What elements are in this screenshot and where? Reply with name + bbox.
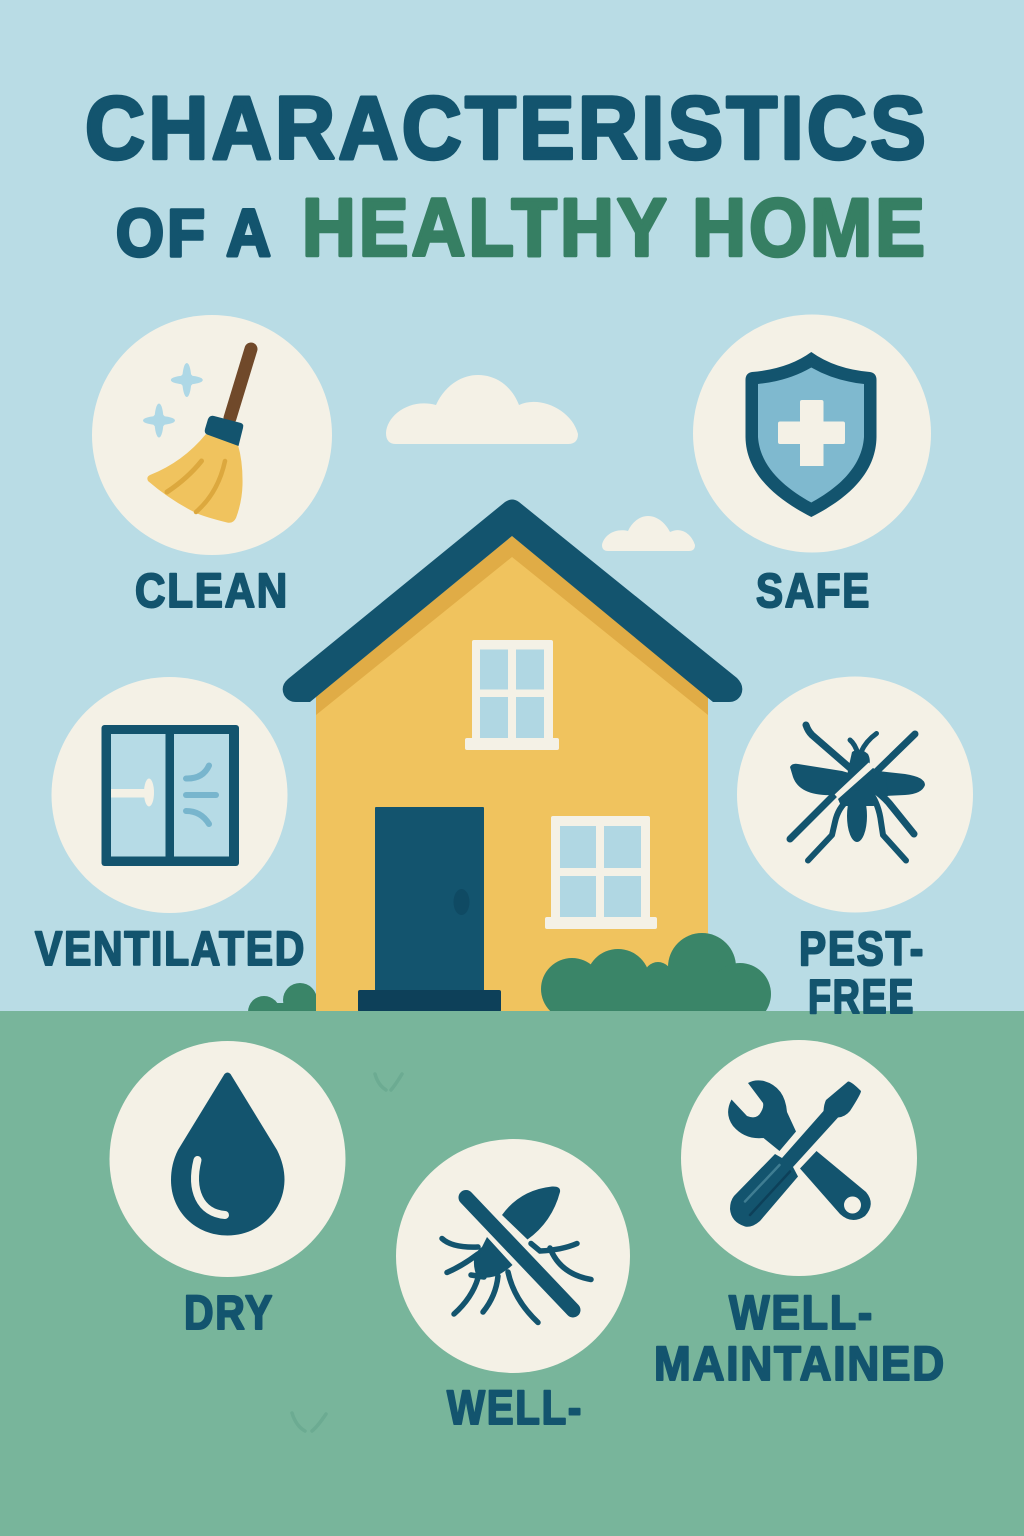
panel: dry	[110, 1041, 346, 1340]
well circle	[396, 1139, 630, 1373]
title line 2 lead: OF A	[116, 196, 274, 271]
title line 1: CHARACTERISTICS	[85, 78, 929, 178]
maintained label: WELL-	[729, 1287, 874, 1340]
pest-free label	[799, 923, 925, 1024]
panel: pest-free	[737, 676, 973, 1024]
right bush	[541, 933, 771, 1025]
door	[375, 807, 484, 997]
roof shadow	[316, 536, 708, 715]
dry circle	[110, 1041, 346, 1277]
icon: water drop	[171, 1072, 284, 1236]
panel: well-lit	[396, 1139, 630, 1435]
panel: clean	[92, 315, 332, 618]
panel: well-maintained	[654, 1040, 946, 1391]
well label: WELL-	[447, 1382, 583, 1435]
icon: window	[102, 725, 239, 866]
house	[283, 500, 742, 1012]
grass tuft lower	[292, 1413, 326, 1431]
left bush	[248, 983, 320, 1028]
house wall	[316, 536, 708, 1012]
sky background	[0, 0, 1024, 1012]
icon: wrench and screwdriver	[728, 1080, 871, 1227]
pest-free label: FREE	[808, 971, 915, 1024]
small cloud	[602, 516, 695, 551]
roof	[283, 500, 742, 702]
safe label: SAFE	[756, 565, 871, 618]
icon: shield	[746, 352, 876, 517]
pest-free label: PEST-	[799, 923, 925, 976]
icon: broom	[143, 349, 251, 523]
title line 2 highlight: HEALTHY HOME	[302, 182, 928, 274]
maintained label	[654, 1287, 946, 1391]
ventilated label: VENTILATED	[35, 923, 306, 976]
dry label: DRY	[184, 1287, 274, 1340]
safe circle	[693, 314, 931, 552]
maintained label: MAINTAINED	[654, 1338, 946, 1391]
title	[85, 78, 929, 274]
clean label: CLEAN	[135, 565, 289, 618]
upper window	[465, 640, 559, 750]
icon: crossed insect	[442, 1186, 591, 1322]
grass tuft upper	[375, 1074, 402, 1090]
lawn	[0, 1011, 1024, 1536]
door step	[358, 990, 501, 1012]
maintained circle	[681, 1040, 917, 1276]
large cloud	[386, 375, 578, 444]
pest-free circle	[737, 676, 973, 912]
ventilated circle	[52, 677, 288, 913]
door knob	[454, 889, 470, 915]
panel: ventilated	[35, 677, 306, 976]
lower window	[545, 816, 657, 929]
icon: crossed mosquito	[790, 725, 925, 860]
panel: safe	[693, 314, 931, 618]
clean circle	[92, 315, 332, 555]
